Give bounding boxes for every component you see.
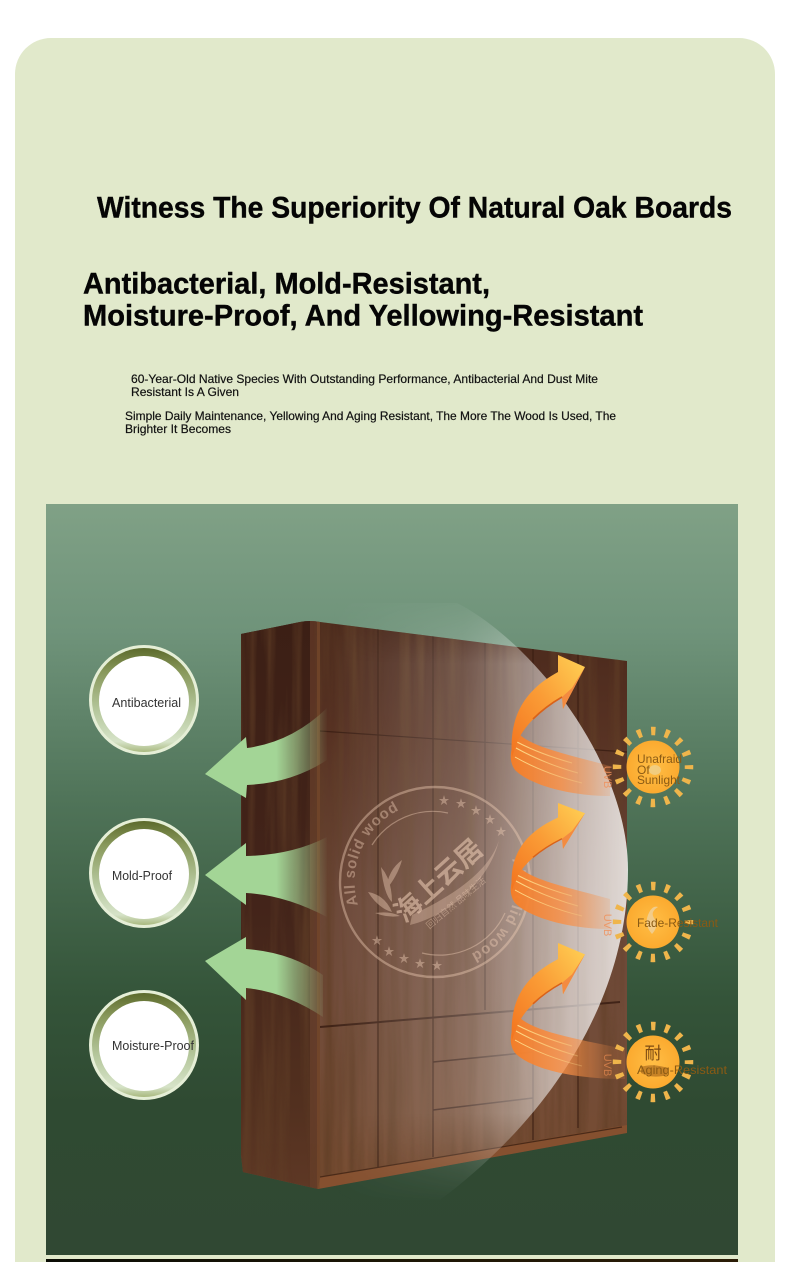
wardrobe [238, 618, 630, 1193]
heading: Moisture-Proof, And Yellowing-Resistant [83, 300, 643, 332]
arrow: UV deflection 1 [511, 655, 613, 796]
watermark stamp: 回归自然 品味生活 [424, 874, 488, 931]
text block: description [125, 372, 616, 436]
arrow: mold-proof green [205, 837, 327, 917]
watermark stamp: ★ [398, 953, 410, 965]
watermark stamp: All solid wood [344, 801, 398, 905]
text block: description: Resistant Is A Given [131, 385, 239, 399]
text block: description: Simple Daily Maintenance, Yellowing And Aging Resistant, The More The Wood Is Used, The [125, 409, 616, 423]
watermark stamp: ★ [456, 798, 466, 810]
watermark stamp: All solid wood [472, 859, 526, 963]
arrow: UV deflection 3: UVB [601, 1054, 613, 1076]
arrow: UV deflection 2 [511, 803, 613, 936]
arrow: UV deflection 2: UVB [601, 914, 613, 936]
sun: unafraid of sunlight [617, 731, 689, 803]
text block: description: 60-Year-Old Native Species With Outstanding Performance, Antibacterial And Dust Mite [131, 372, 598, 386]
bottom dark strip [46, 1259, 738, 1262]
watermark stamp [338, 786, 531, 978]
watermark stamp: ★ [438, 795, 450, 807]
arrow: antibacterial green [205, 708, 327, 798]
sun: unafraid of sunlight: Of [637, 763, 650, 777]
watermark stamp: ★ [484, 814, 496, 826]
watermark stamp: ★ [470, 805, 482, 817]
sun: aging-resistant: Aging-Resistant [637, 1063, 728, 1077]
sun: unafraid of sunlight: Sunlight [637, 773, 681, 787]
arrow: moisture-proof green [205, 937, 323, 1017]
watermark stamp: ★ [432, 960, 442, 972]
heading: Antibacterial, Mold-Resistant, [83, 268, 490, 300]
translucent light lens over wardrobe [355, 611, 628, 1184]
badge: antibacterial [89, 645, 199, 755]
sun: aging-resistant [617, 1026, 728, 1098]
watermark stamp: ★ [414, 958, 426, 970]
arrow: UV deflection 1: UVB [601, 766, 613, 788]
watermark stamp: ★ [496, 826, 506, 838]
watermark stamp: ★ [384, 946, 394, 958]
arrow: UV deflection 3 [511, 943, 625, 1079]
sun: aging-resistant: 耐 [644, 1044, 662, 1063]
badge: mold-proof [89, 818, 199, 928]
heading [83, 268, 643, 332]
title: Witness The Superiority Of Natural Oak Boards [97, 192, 732, 224]
badge: moisture-proof [89, 990, 199, 1100]
panel: green gradient scene [46, 504, 738, 1255]
badge: antibacterial: Antibacterial [112, 696, 181, 710]
text block: description: Brighter It Becomes [125, 422, 231, 436]
watermark stamp: ★ [372, 935, 382, 947]
sun: fade-resistant [617, 886, 719, 958]
badge: mold-proof: Mold-Proof [112, 869, 173, 883]
sun: unafraid of sunlight: Unafraid [637, 752, 682, 766]
watermark stamp: 海上云居 [389, 833, 489, 928]
sun: fade-resistant: Fade-Resistant [637, 916, 719, 930]
badge: moisture-proof: Moisture-Proof [112, 1039, 195, 1053]
